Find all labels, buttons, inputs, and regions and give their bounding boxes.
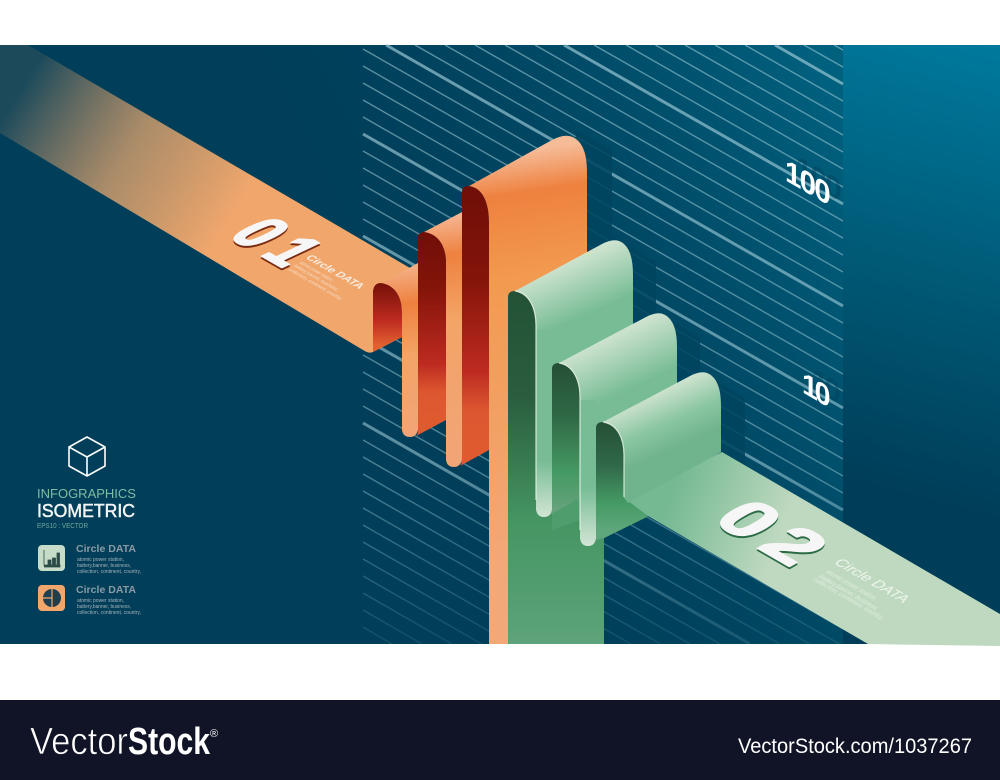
fold highlights — [515, 291, 624, 530]
label on green band: Circle DATA — [830, 557, 914, 605]
number 01: 01 — [213, 209, 341, 274]
shadows cast by ribbons on stripes — [575, 130, 745, 480]
icon: isometric cube — [69, 437, 105, 476]
green base lower fill — [552, 440, 647, 538]
number 01: 01 — [213, 211, 341, 276]
label on green band: battery,banner, business, — [816, 574, 882, 611]
legend text 1: atomic power station, — [77, 557, 124, 563]
legend text 1: battery,banner, business, — [77, 563, 131, 569]
legend text 2: Circle DATA — [76, 585, 136, 596]
scale label 100: 100 — [796, 148, 842, 209]
fold 3 inner — [460, 186, 489, 466]
fold 3 tall panel — [469, 136, 587, 644]
orange flat band — [0, 45, 410, 353]
heading: infographics isometric — [37, 486, 136, 530]
legend text 2 — [76, 585, 141, 616]
label on orange band: Circle DATA — [302, 254, 367, 291]
label on green band: atomic power station, — [823, 569, 881, 601]
legend text 1: Circle DATA — [76, 544, 136, 555]
number 02: 02 — [698, 493, 844, 577]
orange ribbon 01 — [0, 45, 587, 644]
legend text 1 — [76, 544, 141, 575]
diagonal scale stripes — [363, 45, 843, 644]
green flat band — [622, 452, 1000, 646]
legend text 2: battery,banner, business, — [77, 604, 131, 610]
footer logo — [30, 721, 218, 763]
icon: bar chart tile — [38, 545, 65, 571]
scale label 100: 100 — [785, 152, 831, 213]
green base column — [508, 291, 604, 644]
green ribbon 02 — [508, 240, 1000, 646]
label on orange band: collection, continent, country, — [286, 268, 344, 301]
footer image id: VectorStock.com/1037267 — [738, 735, 972, 758]
footer logo: ® — [210, 728, 218, 740]
footer logo: Stock — [128, 721, 211, 763]
dark teal background panel — [0, 45, 1000, 644]
fold 1 surface — [382, 263, 418, 437]
label on orange band: atomic power station, — [297, 261, 335, 283]
legend text 2: atomic power station, — [77, 598, 124, 604]
fold 2 surface — [424, 212, 462, 467]
green stripe 2 — [580, 400, 596, 546]
fold 2 inner — [416, 232, 446, 436]
number 02: 02 — [698, 491, 844, 575]
label on green band: collection, continent, country, — [810, 577, 888, 621]
fold 1 inner — [373, 283, 402, 352]
footer bar — [0, 700, 1000, 780]
heading: infographics isometric: EPS10 : VECTOR — [37, 523, 88, 530]
legend text 2: collection, continent, country, — [77, 610, 141, 616]
green fold 3 inner — [596, 422, 648, 540]
green panel 3 — [603, 372, 721, 503]
green panel 2 — [559, 313, 677, 546]
footer logo: Vector — [30, 721, 128, 763]
green fold 3 inner top — [596, 422, 648, 538]
label on orange band: battery,banner, business, — [291, 264, 340, 292]
scale label 10: 10 — [802, 364, 831, 415]
icon: pie chart tile — [38, 585, 65, 611]
heading: infographics isometric: ISOMETRIC — [37, 501, 135, 521]
green fold 2 inner — [550, 363, 580, 515]
legend text 1: collection, continent, country, — [77, 569, 141, 575]
label on orange band — [286, 254, 367, 301]
green panel 1 — [515, 240, 633, 517]
green stripe 1 — [536, 330, 552, 517]
label on green band — [810, 557, 914, 621]
scale label 10 — [802, 360, 840, 415]
heading: infographics isometric: INFOGRAPHICS — [37, 486, 136, 501]
scale label 10: 10 — [812, 360, 841, 411]
